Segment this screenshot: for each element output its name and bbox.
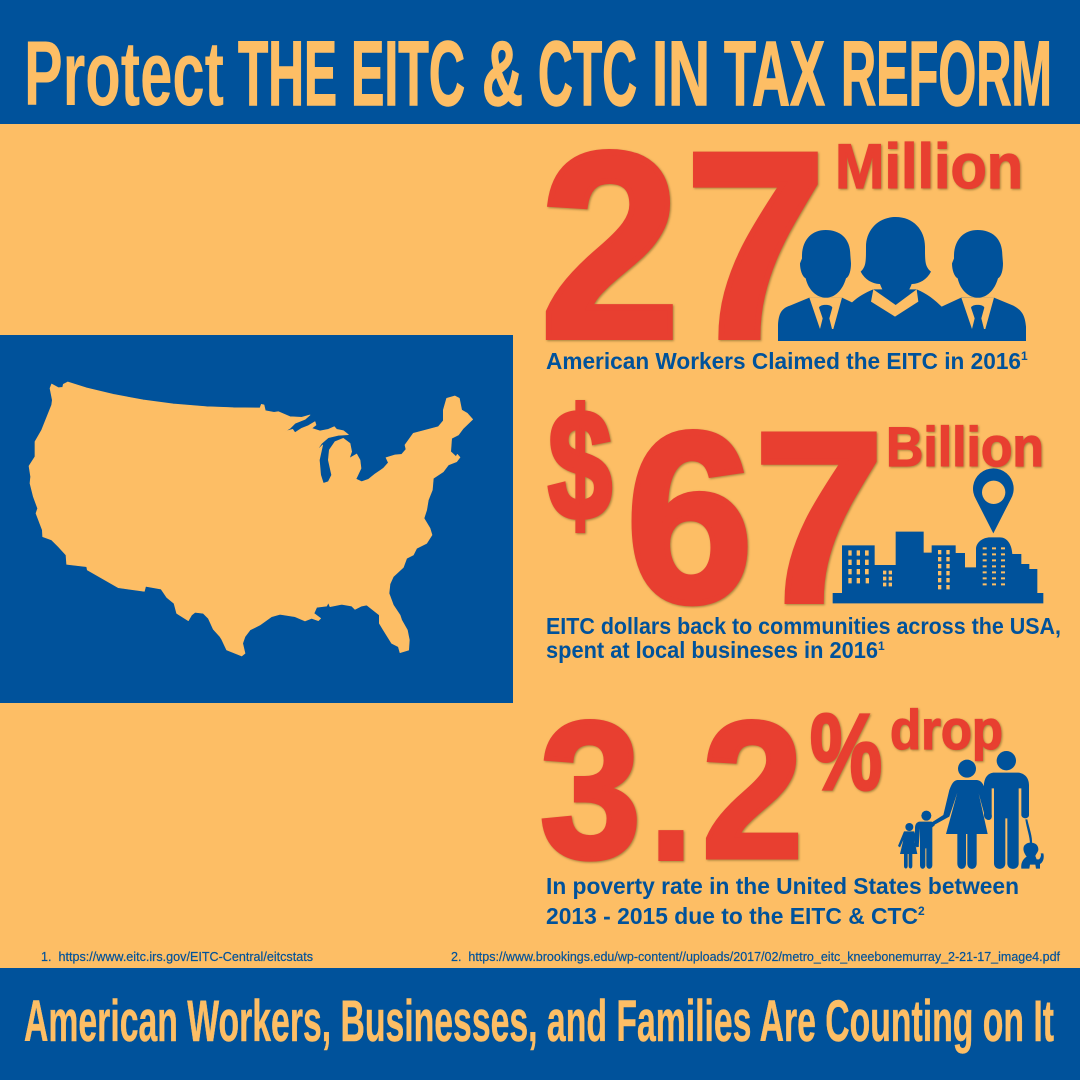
caption bbox=[546, 873, 1019, 929]
caption: 2013 - 2015 due to the EITC & CTC bbox=[546, 903, 918, 929]
number $67: 6 bbox=[626, 383, 753, 653]
label Million: Million bbox=[835, 132, 1023, 202]
number 3.2 bbox=[540, 682, 803, 902]
caption: 1 bbox=[878, 639, 885, 653]
panel: US map bbox=[0, 335, 513, 703]
stat: 27 million bbox=[540, 98, 1028, 394]
title bbox=[24, 23, 1052, 125]
number 27: 7 bbox=[685, 98, 826, 394]
percent sign: % bbox=[810, 691, 882, 812]
caption: spent at local busineses in 2016 bbox=[546, 637, 878, 663]
label Billion: Billion bbox=[886, 415, 1044, 478]
title: IN bbox=[652, 23, 710, 125]
number $67: 7 bbox=[754, 383, 884, 653]
label drop: drop bbox=[890, 698, 1003, 761]
number 3.2: 3 bbox=[540, 682, 641, 899]
stat: 67 billion bbox=[546, 378, 1061, 663]
title: TAX bbox=[724, 23, 825, 125]
map of the United States bbox=[29, 382, 473, 656]
caption: In poverty rate in the United States between bbox=[546, 873, 1019, 899]
title: EITC bbox=[351, 23, 465, 125]
stat: 3.2 percent drop bbox=[540, 682, 1044, 929]
footer banner bbox=[0, 968, 1080, 1080]
footnote 1: 1. https://www.eitc.irs.gov/EITC-Central/eitcstats bbox=[41, 949, 313, 964]
title: CTC bbox=[538, 23, 637, 125]
number 3.2: . bbox=[648, 685, 694, 902]
title banner bbox=[0, 0, 1080, 125]
icon: city with location pin bbox=[833, 468, 1043, 603]
number 3.2: 2 bbox=[702, 682, 803, 899]
icon: family with dog bbox=[898, 751, 1044, 869]
number $67 bbox=[548, 378, 884, 653]
footnote 2: 2. https://www.brookings.edu/wp-content//uploads/2017/02/metro_eitc_kneebonemurray_2-21-17_image4.pdf bbox=[451, 949, 1060, 964]
caption bbox=[546, 613, 1061, 663]
caption: American Workers Claimed the EITC in 2016 bbox=[546, 348, 1021, 374]
stat: 27 million: 1 bbox=[1021, 349, 1028, 363]
number 27 bbox=[540, 98, 826, 394]
caption: 2 bbox=[918, 904, 925, 918]
icon: three workers bbox=[778, 217, 1026, 341]
number 27: 2 bbox=[540, 98, 680, 394]
title: Protect bbox=[24, 23, 224, 125]
title: & bbox=[482, 23, 523, 125]
number $67: $ bbox=[548, 378, 612, 553]
title: THE bbox=[238, 23, 337, 125]
